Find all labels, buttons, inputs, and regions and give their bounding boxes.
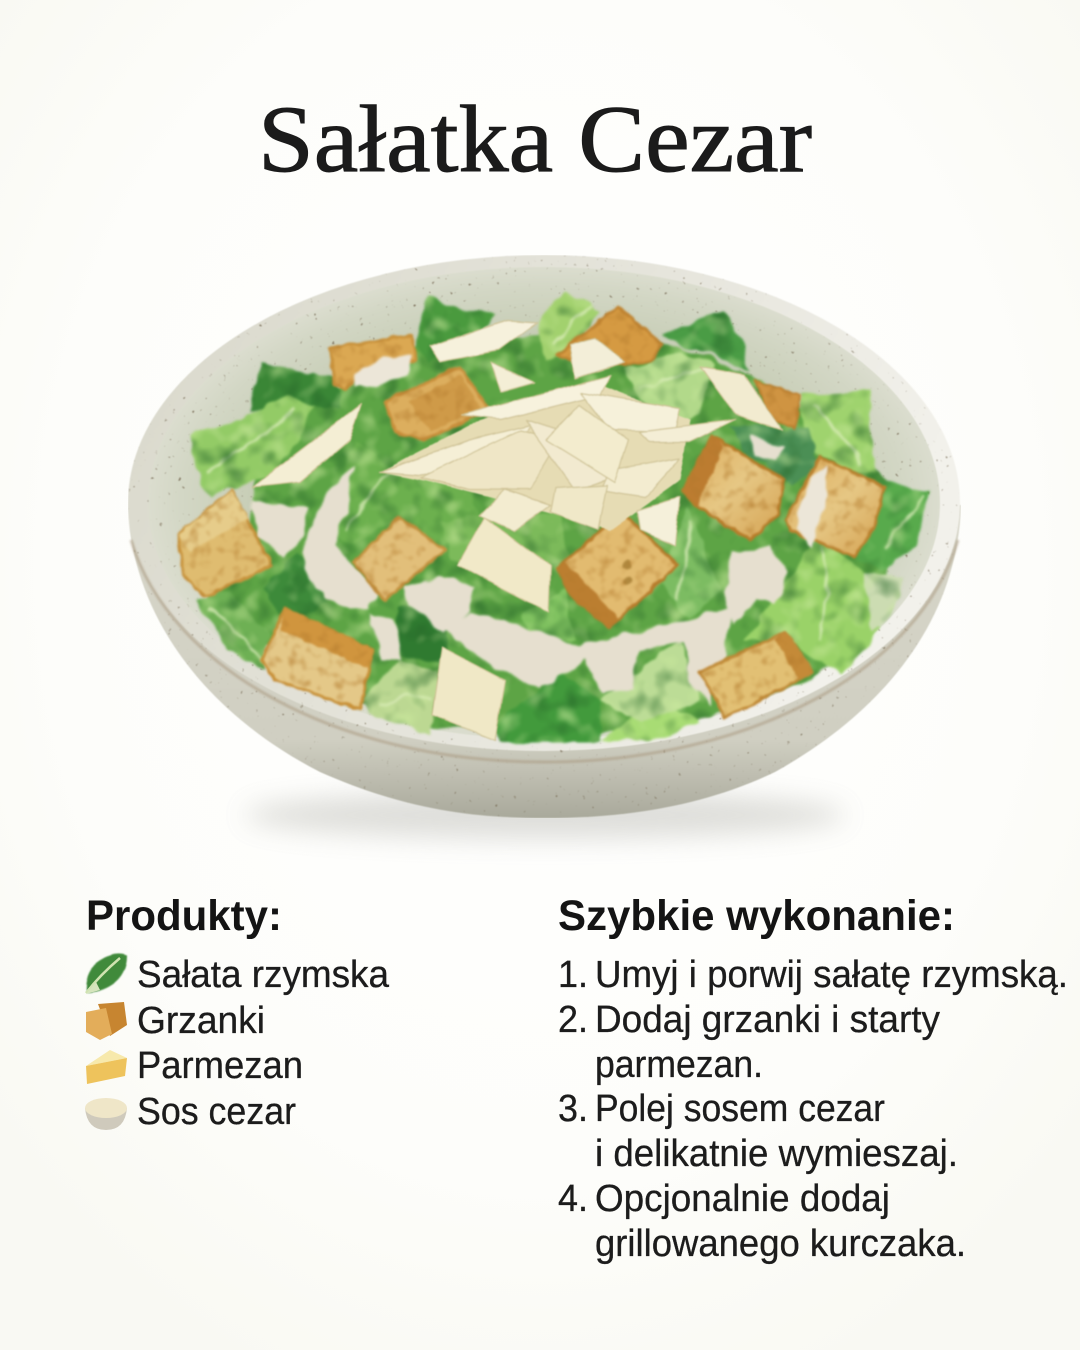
lower-centre pale leaf: [360, 660, 440, 735]
centre right leaf: [660, 505, 720, 620]
shaving small: [490, 362, 535, 392]
dressing on crouton 6: [795, 465, 826, 545]
dressing on crouton 1: [352, 357, 412, 386]
dressing layer: [253, 436, 787, 705]
ingredient: croutons: Grzanki: [137, 1000, 265, 1042]
crouton 2: [385, 367, 488, 440]
shaving top right: [570, 338, 625, 378]
large shaving centre: [458, 517, 550, 612]
step 3: i delikatnie wymieszaj.: [595, 1133, 958, 1175]
step 3: [558, 1088, 958, 1175]
dressing streak: [303, 465, 380, 612]
step 2: Dodaj grzanki i starty: [595, 999, 940, 1041]
crouton 8: [700, 632, 813, 718]
shaving top: [430, 320, 538, 362]
bowl shadow: [245, 791, 845, 839]
ingredient: parmesan: Parmezan: [137, 1045, 303, 1087]
bottom pale leaf: [600, 640, 700, 722]
leaves base mass: [205, 335, 905, 738]
cheese pile base: [380, 385, 690, 530]
lower-left leaf: [196, 590, 270, 668]
shaving pile 6: [600, 458, 680, 497]
step 4: [558, 1178, 966, 1265]
heading: Produkty: Produkty:: [86, 892, 282, 940]
crouton 6: [785, 457, 885, 557]
dressing drizzle: [445, 605, 735, 705]
dark leaf: upper left: [250, 362, 342, 412]
light leaf: lower right: [745, 532, 880, 676]
salad: [178, 291, 932, 742]
bowl inner surface: [148, 267, 940, 739]
shaving pile 2: [460, 375, 610, 420]
shaving pile 5: [525, 420, 610, 490]
crouton 4: [755, 380, 800, 428]
title: Sałatka Cezar: [258, 86, 812, 192]
step 4: Opcjonalnie dodaj: [595, 1178, 890, 1220]
light leaf: upper centre right: [625, 350, 715, 425]
steps list: [558, 954, 1068, 1265]
light leaf: left: [190, 396, 315, 497]
shaving pile 1: [380, 425, 530, 475]
step 2: parmezan.: [595, 1044, 763, 1086]
pale leaf: far right: [862, 572, 905, 632]
centre leaf: [440, 510, 570, 580]
icon: parmesan wedge: [86, 1050, 127, 1084]
light leaf: top right: [537, 291, 600, 358]
lower-centre dark leaf: [495, 670, 600, 742]
small centre leaf: [520, 590, 575, 640]
crouton 5: [682, 436, 785, 540]
mid leaf: right: [856, 478, 932, 572]
parmesan shavings: [253, 320, 782, 740]
crouton 11: [262, 608, 373, 710]
step 4: grillowanego kurczaka.: [595, 1223, 966, 1265]
teal leaf: right: [730, 425, 820, 485]
bowl rim: [128, 255, 960, 751]
light leaf: right: [800, 392, 876, 472]
step 1: 1.: [558, 954, 588, 996]
shadowed leaf: [395, 600, 450, 665]
ceramic bowl: [128, 255, 961, 818]
centre-left leaf: [325, 440, 480, 545]
step 3: Polej sosem cezar: [595, 1088, 885, 1130]
crouton 9: [178, 490, 272, 597]
step 4: 4.: [558, 1178, 588, 1220]
step 2: [558, 999, 940, 1086]
ingredients list: [85, 953, 390, 1133]
shaving pile 4: [580, 392, 680, 432]
dark leaf: top: [415, 297, 495, 362]
shaving thin: [640, 420, 735, 442]
lettuce layer: [190, 291, 932, 742]
dressing on croutons: [352, 357, 826, 545]
shaving right of pile: [637, 497, 680, 545]
crouton layer: [178, 307, 885, 718]
dark leaf: upper right: [660, 312, 750, 372]
rim outer edge: [131, 540, 958, 762]
shaving top of pile: [547, 405, 628, 482]
icon: sauce bowl: [85, 1098, 127, 1130]
bottom bright leaf: [600, 695, 700, 742]
heading: Szybkie wykonanie: Szybkie wykonanie:: [558, 892, 955, 940]
dressing blob right: [723, 543, 787, 625]
crouton 7: [557, 512, 677, 628]
shaving left: [253, 403, 362, 487]
crouton 1: [330, 335, 416, 390]
shaving pile 3: [420, 430, 560, 490]
dressing dab: [752, 436, 782, 462]
ingredient: Caesar sauce: Sos cezar: [137, 1091, 296, 1133]
icon: croutons: [86, 1002, 127, 1040]
crouton 10: [353, 517, 445, 600]
large shaving bottom: [432, 647, 505, 740]
dressing drip: [372, 612, 402, 660]
crouton 3: [557, 307, 663, 366]
lower-left dark leaf: [262, 552, 330, 625]
dressing blob left: [253, 500, 310, 558]
dressing blob centre: [405, 577, 475, 635]
ingredient: lettuce: Sałata rzymska: [137, 954, 390, 996]
shaving pile 7: [550, 485, 607, 530]
icon: romaine leaf: [86, 953, 127, 994]
shaving right: [700, 367, 782, 430]
illustration: bowl of Caesar salad: [128, 255, 961, 839]
shaving pile 8: [480, 490, 550, 530]
step 2: 2.: [558, 999, 588, 1041]
pale leaf ribs: [205, 305, 925, 705]
step 1: Umyj i porwij sałatę rzymską.: [595, 954, 1068, 996]
step 3: 3.: [558, 1088, 588, 1130]
bowl body: [128, 505, 961, 818]
